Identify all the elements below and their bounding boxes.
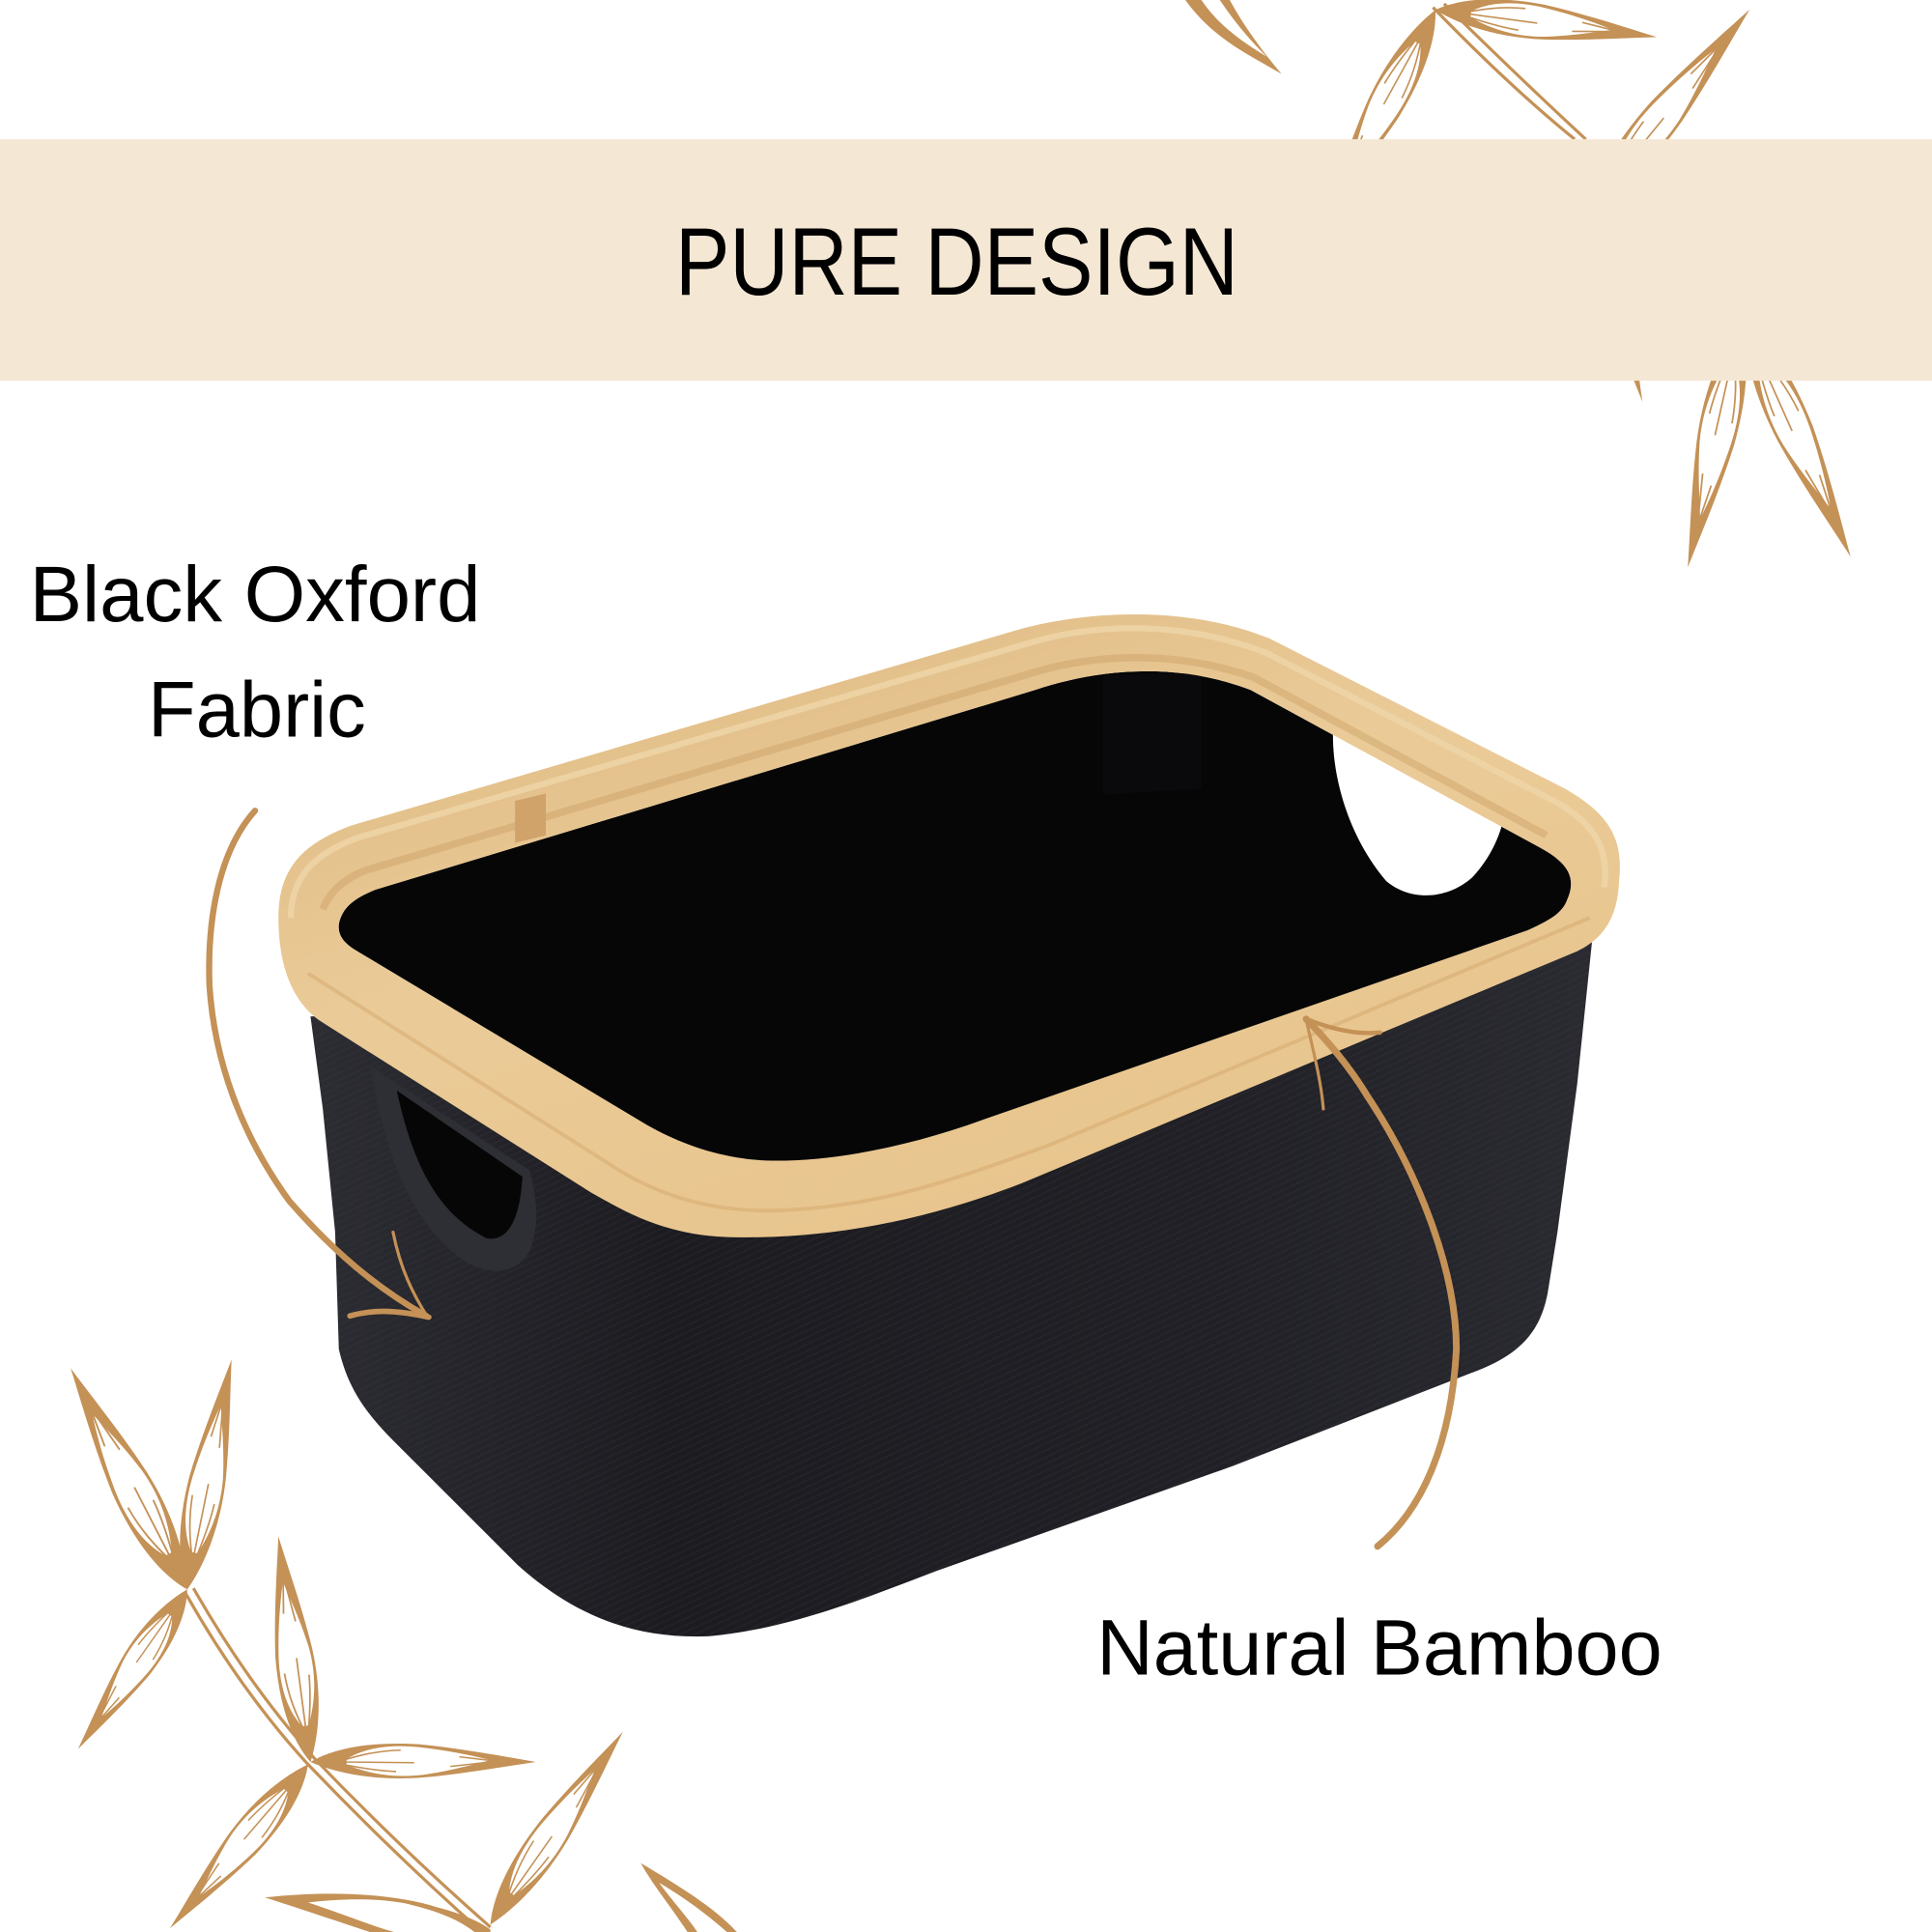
leaf: bottom corner, clipped by the bottom edge [640,1863,737,1932]
leaf: lower left under banner [1669,319,1760,572]
leaf: B lower left [157,1754,322,1932]
left handle cut-out [370,1065,536,1271]
leaf: A upper right [168,1356,249,1593]
label: black oxford fabric: Fabric [148,667,366,754]
leaf: far top, clipped by the top edge [1185,0,1282,74]
arrow: to black oxford fabric [210,810,429,1318]
leaf: C upper right [475,1721,637,1932]
decorative bamboo leaves: top right [1185,0,1869,572]
leaf: small tip under banner [1578,206,1655,405]
banner [0,139,1932,381]
label: black oxford fabric [30,551,480,754]
far handle hole [1333,727,1503,895]
arrow: to natural bamboo [1306,1019,1457,1547]
decorative bamboo leaves: bottom left [51,1356,737,1932]
leaf: lower right under banner [1726,314,1869,565]
label: black oxford fabric: Black Oxford [30,551,480,639]
leaf: upper right [1574,0,1764,220]
stems: bottom left [185,1588,491,1931]
leaf: B up [258,1534,328,1765]
leaf: C left, clipped by the bottom edge [265,1893,491,1932]
leaf: A upper left [51,1359,205,1600]
title: PURE DESIGN [675,209,1238,316]
leaf: left below node [1309,2,1452,225]
stem: top right [1433,4,1586,139]
leaf: A lower left [65,1580,202,1759]
leaf: right of node [1434,0,1660,54]
bamboo basket product [278,614,1620,1636]
label: natural bamboo: Natural Bamboo [1096,1604,1662,1691]
fabric body [310,943,1592,1636]
basket interior [339,671,1571,1161]
bamboo rim [278,614,1620,1237]
leaf: B right [310,1744,536,1778]
